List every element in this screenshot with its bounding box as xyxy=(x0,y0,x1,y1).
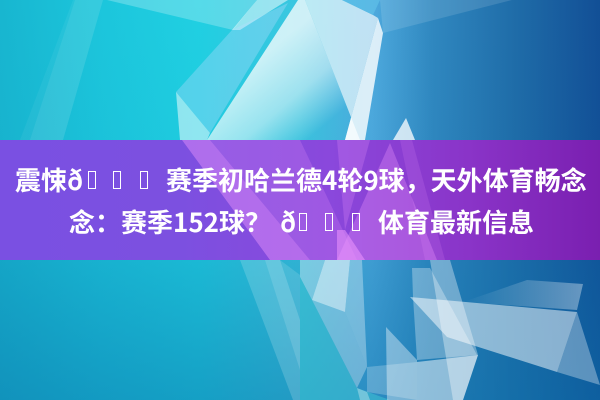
title xyxy=(15,161,587,240)
title line 1: 赛季初哈兰德4轮9球，天外体育畅念 xyxy=(166,161,587,198)
top band xyxy=(107,0,257,30)
bottom facets xyxy=(240,260,300,400)
title line 2: 念：赛季152球？ xyxy=(69,203,271,240)
purple title band xyxy=(0,140,600,260)
title line 1: 震悚ð xyxy=(15,161,83,198)
title line 2: 体育最新信息 xyxy=(378,203,534,240)
top left faint strips xyxy=(20,0,103,140)
central pale facets xyxy=(176,3,288,133)
title line 2 xyxy=(69,203,534,240)
title line 2: ð xyxy=(280,203,296,240)
